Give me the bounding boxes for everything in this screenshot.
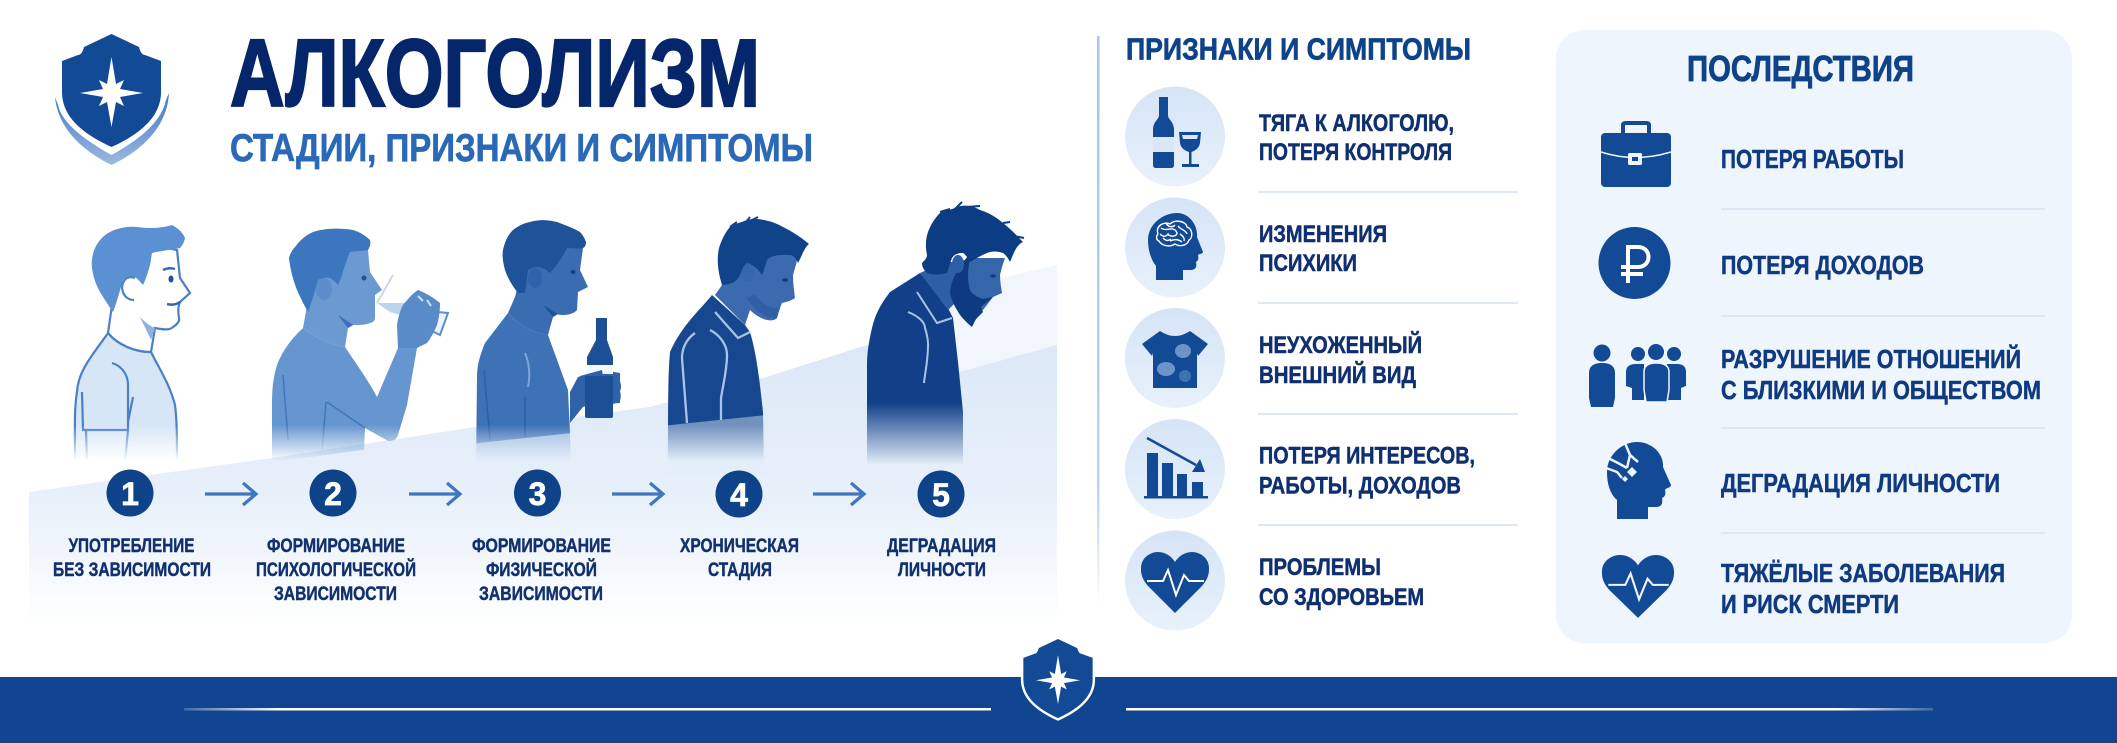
stage 3 label: ФИЗИЧЕСКОЙ [486,557,597,581]
signs row 2 text: ИЗМЕНЕНИЯ [1259,221,1387,248]
signs row 5 text: СО ЗДОРОВЬЕМ [1259,584,1424,611]
stage 5 badge [918,470,964,518]
stage 5 label [887,535,996,581]
icon: heart with pulse [1602,555,1674,618]
consequence 1 text: ПОТЕРЯ РАБОТЫ [1721,144,1904,174]
signs row 1 text: ТЯГА К АЛКОГОЛЮ, [1259,110,1454,137]
signs row 1 text [1259,110,1454,166]
background band: pale back layer [905,265,1057,400]
stage 5 label: ЛИЧНОСТИ [898,559,986,581]
signs row 5 text [1259,554,1424,611]
stage 4 badge [716,470,762,518]
stage 5 badge: 5 [932,477,950,513]
consequence 5 text: ТЯЖЁЛЫЕ ЗАБОЛЕВАНИЯ [1721,558,2005,588]
signs row 4 text: РАБОТЫ, ДОХОДОВ [1259,472,1461,500]
icon: heart with pulse [1125,530,1225,630]
stage 5 label: ДЕГРАДАЦИЯ [887,535,996,557]
consequences heading: ПОСЛЕДСТВИЯ [1687,48,1914,89]
stage 1 badge: 1 [121,476,139,512]
signs row 2 text [1259,221,1387,277]
consequence 3 text: РАЗРУШЕНИЕ ОТНОШЕНИЙ [1721,344,2021,374]
icon: stained shirt [1125,308,1225,408]
subtitle: СТАДИИ, ПРИЗНАКИ И СИМПТОМЫ [230,127,813,170]
stage 2 label: ФОРМИРОВАНИЕ [267,535,405,557]
stage 4 label: ХРОНИЧЕСКАЯ [680,535,799,557]
panel: signs and symptoms [1125,32,1518,630]
signs row 1 text: ПОТЕРЯ КОНТРОЛЯ [1259,139,1452,166]
stage 1 badge [106,470,154,516]
consequence 2 text: ПОТЕРЯ ДОХОДОВ [1721,250,1924,280]
signs row 3 text: НЕУХОЖЕННЫЙ [1259,331,1422,359]
stage 4 label: СТАДИЯ [708,559,772,581]
figure 2 lower cut by the band [268,450,366,475]
icon: ruble coin [1598,227,1670,299]
icon: briefcase [1601,123,1671,187]
arrow 4 to 5 [813,483,864,505]
background rising band [29,345,1057,628]
icon: falling bar chart [1125,419,1225,519]
footer bar [0,677,2117,743]
logo: shield [55,34,169,165]
stage 3 label: ЗАВИСИМОСТИ [479,583,603,605]
figure 5: degradation [867,202,1024,470]
icon: person apart from group [1589,344,1686,407]
title: АЛКОГОЛИЗМ [230,20,760,127]
stage 2 badge [310,470,356,516]
icon: head with brain [1125,198,1225,298]
stage 4 label [680,535,799,581]
figure 1: no dependence [75,225,190,462]
stage 1 label: УПОТРЕБЛЕНИЕ [68,535,194,557]
stage 3 badge [514,470,561,516]
stage 3 label [472,535,611,605]
arrow 2 to 3 [409,483,460,505]
figure 3 lower veil from the band [474,433,572,475]
stage 1 label: БЕЗ ЗАВИСИМОСТИ [53,559,211,581]
signs row 5 text: ПРОБЛЕМЫ [1259,554,1381,581]
icon: bottle and glass [1125,86,1225,186]
consequence 3 text: С БЛИЗКИМИ И ОБЩЕСТВОМ [1721,375,2041,405]
signs row 3 text: ВНЕШНИЙ ВИД [1259,361,1416,389]
arrow 3 to 4 [612,483,663,505]
figure 3: holding a bottle [476,220,621,470]
figure 2: drinking from a glass [272,229,448,470]
stage 2 label [256,535,416,605]
stage 2 badge: 2 [324,476,342,512]
consequence 5 text: И РИСК СМЕРТИ [1721,589,1899,619]
consequence 5 text [1721,558,2005,619]
signs row 4 text: ПОТЕРЯ ИНТЕРЕСОВ, [1259,442,1475,470]
arrow 1 to 2 [205,483,256,505]
consequence 4 text: ДЕГРАДАЦИЯ ЛИЧНОСТИ [1721,468,2000,498]
stage 3 badge: 3 [529,476,546,512]
signs row 4 text [1259,442,1475,500]
panel: consequences [1556,30,2072,643]
icon: cracked head [1606,442,1671,519]
stage 2 label: ЗАВИСИМОСТИ [274,583,397,605]
figure 4 lower veil from the band [666,415,766,475]
consequence 3 text [1721,344,2041,405]
stage 3 label: ФОРМИРОВАНИЕ [472,535,611,557]
stage 4 badge: 4 [730,477,748,513]
signs heading: ПРИЗНАКИ И СИМПТОМЫ [1126,32,1471,66]
signs row 2 text: ПСИХИКИ [1259,250,1357,277]
stage 1 label [53,535,211,581]
stage 2 label: ПСИХОЛОГИЧЕСКОЙ [256,557,416,581]
footer shield emblem [1023,639,1093,718]
figure 4: chronic stage [668,217,809,470]
signs row 3 text [1259,331,1422,389]
